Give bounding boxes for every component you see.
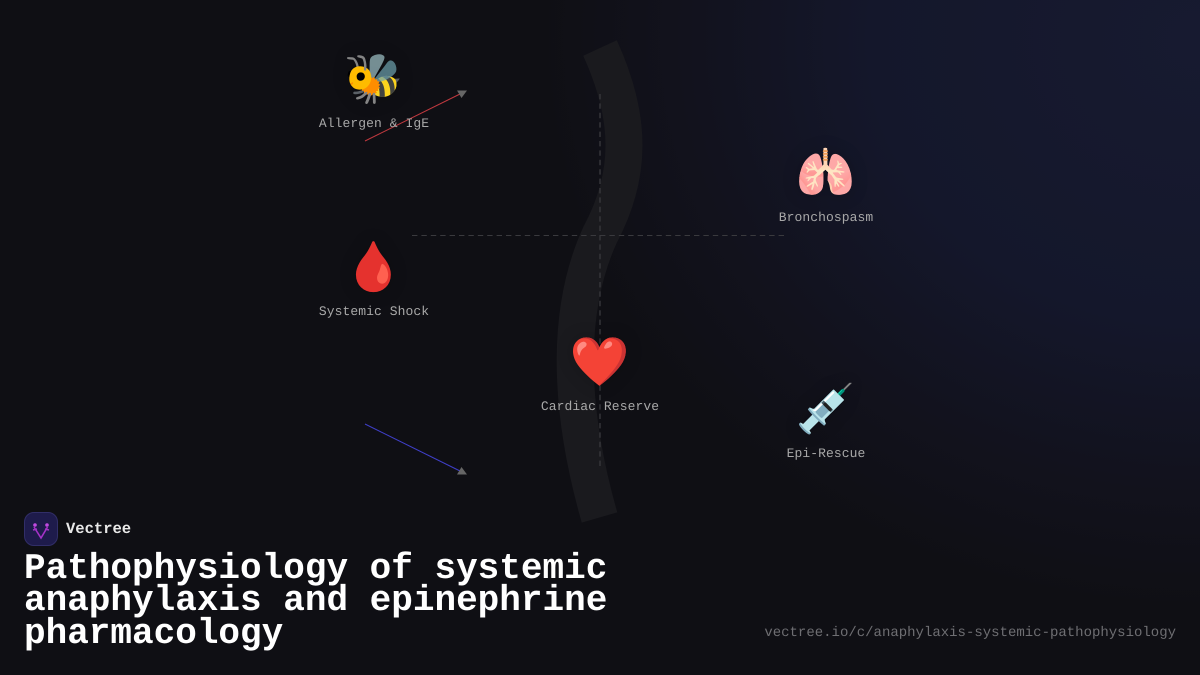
brand name: Vectree [66, 520, 131, 538]
node: Bronchospasm [779, 144, 873, 224]
source URL: vectree.io/c/anaphylaxis-systemic-pathophysiology [764, 625, 1176, 641]
node: Allergen & IgE: Allergen & IgE [319, 116, 429, 130]
arrow: allergen upward [365, 90, 467, 141]
vertical dashed axis [599, 94, 601, 466]
title [24, 548, 607, 654]
node: Cardiac Reserve [541, 333, 659, 414]
node: Epi-Rescue: 💉 [796, 380, 855, 437]
node: Systemic Shock [319, 238, 429, 318]
curved backdrop band [575, 48, 624, 518]
arrow: shock downward [365, 424, 467, 474]
title: anaphylaxis and epinephrine [24, 580, 607, 621]
node: Cardiac Reserve: ❤️ [570, 333, 629, 390]
node: Bronchospasm: 🫁 [796, 144, 855, 201]
brand logo [24, 512, 58, 546]
node: Allergen & IgE: 🐝 [344, 50, 403, 107]
title: pharmacology [24, 613, 283, 654]
title: Pathophysiology of systemic [24, 548, 607, 589]
node: Cardiac Reserve: Cardiac Reserve [541, 398, 659, 414]
node: Systemic Shock: Systemic Shock [319, 304, 429, 318]
node: Allergen & IgE [318, 50, 429, 130]
node: Epi-Rescue [787, 380, 865, 460]
node: Systemic Shock: 🩸 [344, 238, 403, 295]
node: Epi-Rescue: Epi-Rescue [787, 446, 865, 460]
node: Bronchospasm: Bronchospasm [779, 210, 873, 224]
horizontal dashed axis [412, 234, 785, 236]
